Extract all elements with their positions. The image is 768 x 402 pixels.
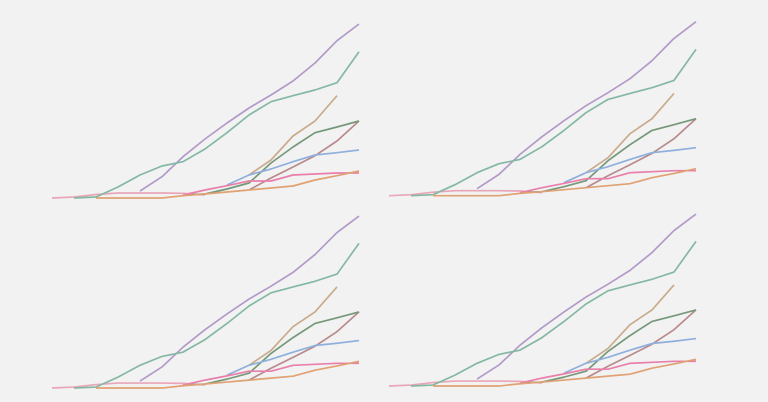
chart: top right [389,22,696,196]
chart: top left [52,24,359,198]
chart: bottom left [52,216,359,388]
chart: bottom right [389,214,696,386]
